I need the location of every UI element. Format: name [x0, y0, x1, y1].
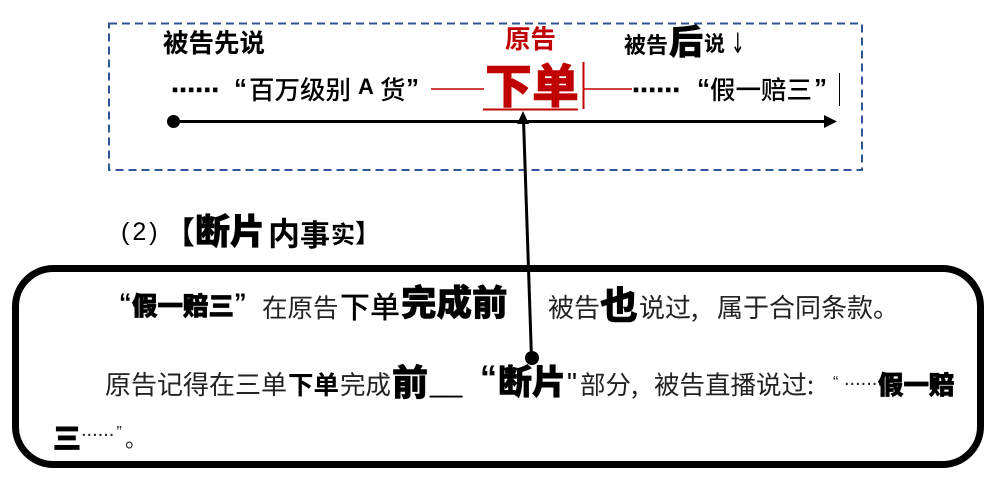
text: line two of facts: “ [833, 374, 838, 391]
section heading: 实 [331, 215, 355, 250]
text: line three of facts: ...... [81, 419, 114, 441]
text: million-level A goods quote: ...... [171, 67, 219, 99]
text: million-level A goods quote: A [358, 74, 374, 99]
text: line two of facts: ...... [844, 368, 877, 390]
text: million-level A goods quote: 货 [380, 70, 406, 107]
text: line one of facts: 属于合同条款。 [717, 288, 899, 325]
text: line three of facts: 。 [125, 422, 147, 454]
section heading: 内 [268, 209, 300, 255]
section heading: 【 [164, 208, 195, 253]
text: line one of facts: 在原告 [262, 288, 339, 325]
text: line one of facts: “ [119, 289, 132, 317]
text: line two of facts: __ [430, 367, 462, 399]
text: million-level A goods quote: “ [234, 73, 247, 103]
text: fake one pay three quote: 假一赔三 [710, 70, 812, 107]
text: line one of facts: 被告 [548, 288, 600, 325]
text: line two of facts: 假一赔 [878, 365, 955, 402]
heading: defendant speaks afterwards: 说 [704, 28, 725, 58]
text: million-level A goods quote: ” [406, 73, 419, 103]
text: fake one pay three quote: “ [697, 73, 710, 103]
text: line one of facts: ” [234, 289, 246, 317]
text: line one of facts: 完成前 [401, 275, 508, 326]
label: place order: 下单 [485, 48, 579, 117]
heading: defendant speaks afterwards: ↓ [731, 27, 745, 60]
text: million-level A goods quote: 百万级别 [249, 70, 351, 107]
heading: defendant speaks afterwards: 后 [669, 15, 703, 64]
text: line one of facts: 说过, [639, 288, 698, 325]
heading: defendant speaks first: 被告先说 [163, 23, 265, 60]
text: line one of facts: 假一赔三 [132, 286, 234, 323]
section heading: 断片 [195, 204, 265, 255]
text: line one of facts: 也 [600, 275, 638, 330]
text: line two of facts: 前 [392, 354, 428, 406]
label: plaintiff: 原告 [505, 19, 556, 56]
text: line one of facts: 下单 [340, 283, 400, 327]
heading: defendant speaks afterwards: 被告 [624, 28, 668, 60]
text: line two of facts: 被告直播说过: [654, 365, 814, 402]
section heading: (2) [121, 218, 161, 246]
text: line two of facts: “ [480, 359, 497, 397]
text: line two of facts: 完成 [340, 365, 391, 402]
text: line two of facts: 原告记得在三单 [105, 365, 287, 402]
text: line three of facts: 三 [53, 417, 81, 457]
text: fake one pay three quote: ” [814, 73, 827, 103]
text: line two of facts: 部分, [580, 365, 638, 402]
text: line two of facts: 下单 [288, 365, 339, 402]
text: line three of facts: ” [116, 424, 122, 441]
section heading: 】 [355, 214, 380, 250]
text: fake one pay three quote: ...... [632, 67, 680, 99]
section heading: 事 [300, 211, 330, 255]
text: line two of facts: " [567, 367, 577, 398]
text: line two of facts: 断片 [498, 355, 566, 404]
